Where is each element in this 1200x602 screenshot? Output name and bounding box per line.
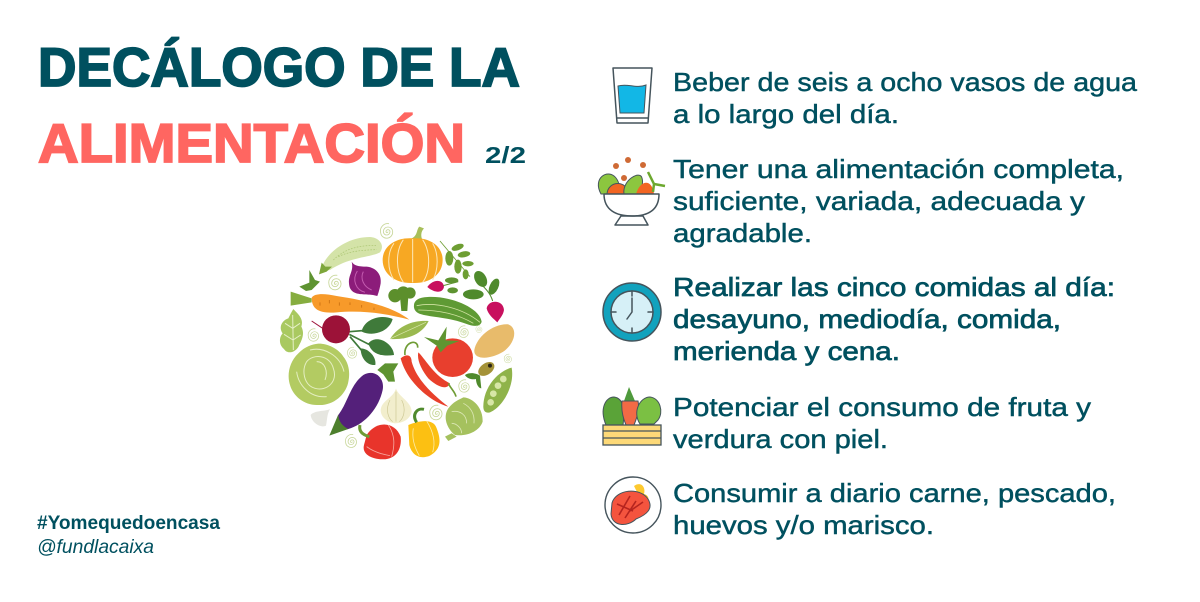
pea pod (483, 368, 512, 413)
text: protein: Consumir a diario carne, pescado, (673, 478, 1116, 508)
large radish (463, 269, 504, 322)
small radish (427, 277, 458, 293)
icon: vegetable crate (603, 387, 661, 445)
text: protein (673, 478, 1116, 540)
handle: @fundlacaixa (37, 537, 154, 558)
text: five meals: Realizar las cinco comidas al día: (673, 272, 1115, 302)
icon: glass of water (613, 68, 652, 123)
artichoke (445, 397, 483, 441)
herb sprig (440, 241, 474, 279)
carrot (291, 292, 409, 320)
cabbage (289, 344, 349, 405)
text: five meals: merienda y cena. (673, 336, 900, 366)
spirals (308, 224, 512, 448)
beetroot (312, 315, 394, 365)
text: complete diet: agradable. (673, 218, 812, 248)
icon: salad bowl (598, 157, 665, 225)
title: 2/2 (485, 142, 526, 168)
pumpkin (383, 227, 443, 283)
hashtag: #Yomequedoencasa (37, 513, 220, 534)
text: protein: huevos y/o marisco. (673, 510, 934, 540)
herb sprigs (299, 270, 398, 382)
garlic (311, 409, 330, 426)
text: five meals: desayuno, mediodía, comida, (673, 304, 1061, 334)
leaf (390, 321, 429, 339)
title: DECÁLOGO DE LA (38, 36, 520, 98)
olive (465, 359, 497, 388)
red onion (349, 262, 381, 296)
icon: meat plate (605, 477, 661, 533)
yellow bell pepper (408, 409, 440, 457)
eggplant (329, 373, 383, 436)
text: water (673, 67, 1138, 129)
red bell pepper (360, 425, 401, 459)
text: water: Beber de seis a ocho vasos de agua (673, 67, 1138, 97)
zucchini (319, 237, 382, 274)
broccoli (388, 286, 416, 311)
text: complete diet: suficiente, variada, adecuada y (673, 186, 1085, 216)
title: ALIMENTACIÓN (38, 112, 465, 174)
white onion (381, 388, 412, 423)
text: fruit and vegetables (673, 392, 1091, 454)
text: five meals (673, 272, 1115, 366)
text: fruit and vegetables: Potenciar el consumo de fruta y (673, 392, 1091, 422)
text: water: a lo largo del día. (673, 99, 899, 129)
title (38, 36, 526, 174)
chilli peppers (401, 342, 456, 407)
vegetable circle illustration (280, 224, 514, 459)
cucumber (414, 297, 482, 326)
oak lettuce leaf (280, 309, 303, 352)
potato (474, 324, 514, 358)
icon: clock (603, 283, 661, 341)
text: complete diet (673, 154, 1124, 248)
text: fruit and vegetables: verdura con piel. (673, 424, 888, 454)
text: complete diet: Tener una alimentación completa, (673, 154, 1124, 184)
tomato (424, 327, 473, 377)
